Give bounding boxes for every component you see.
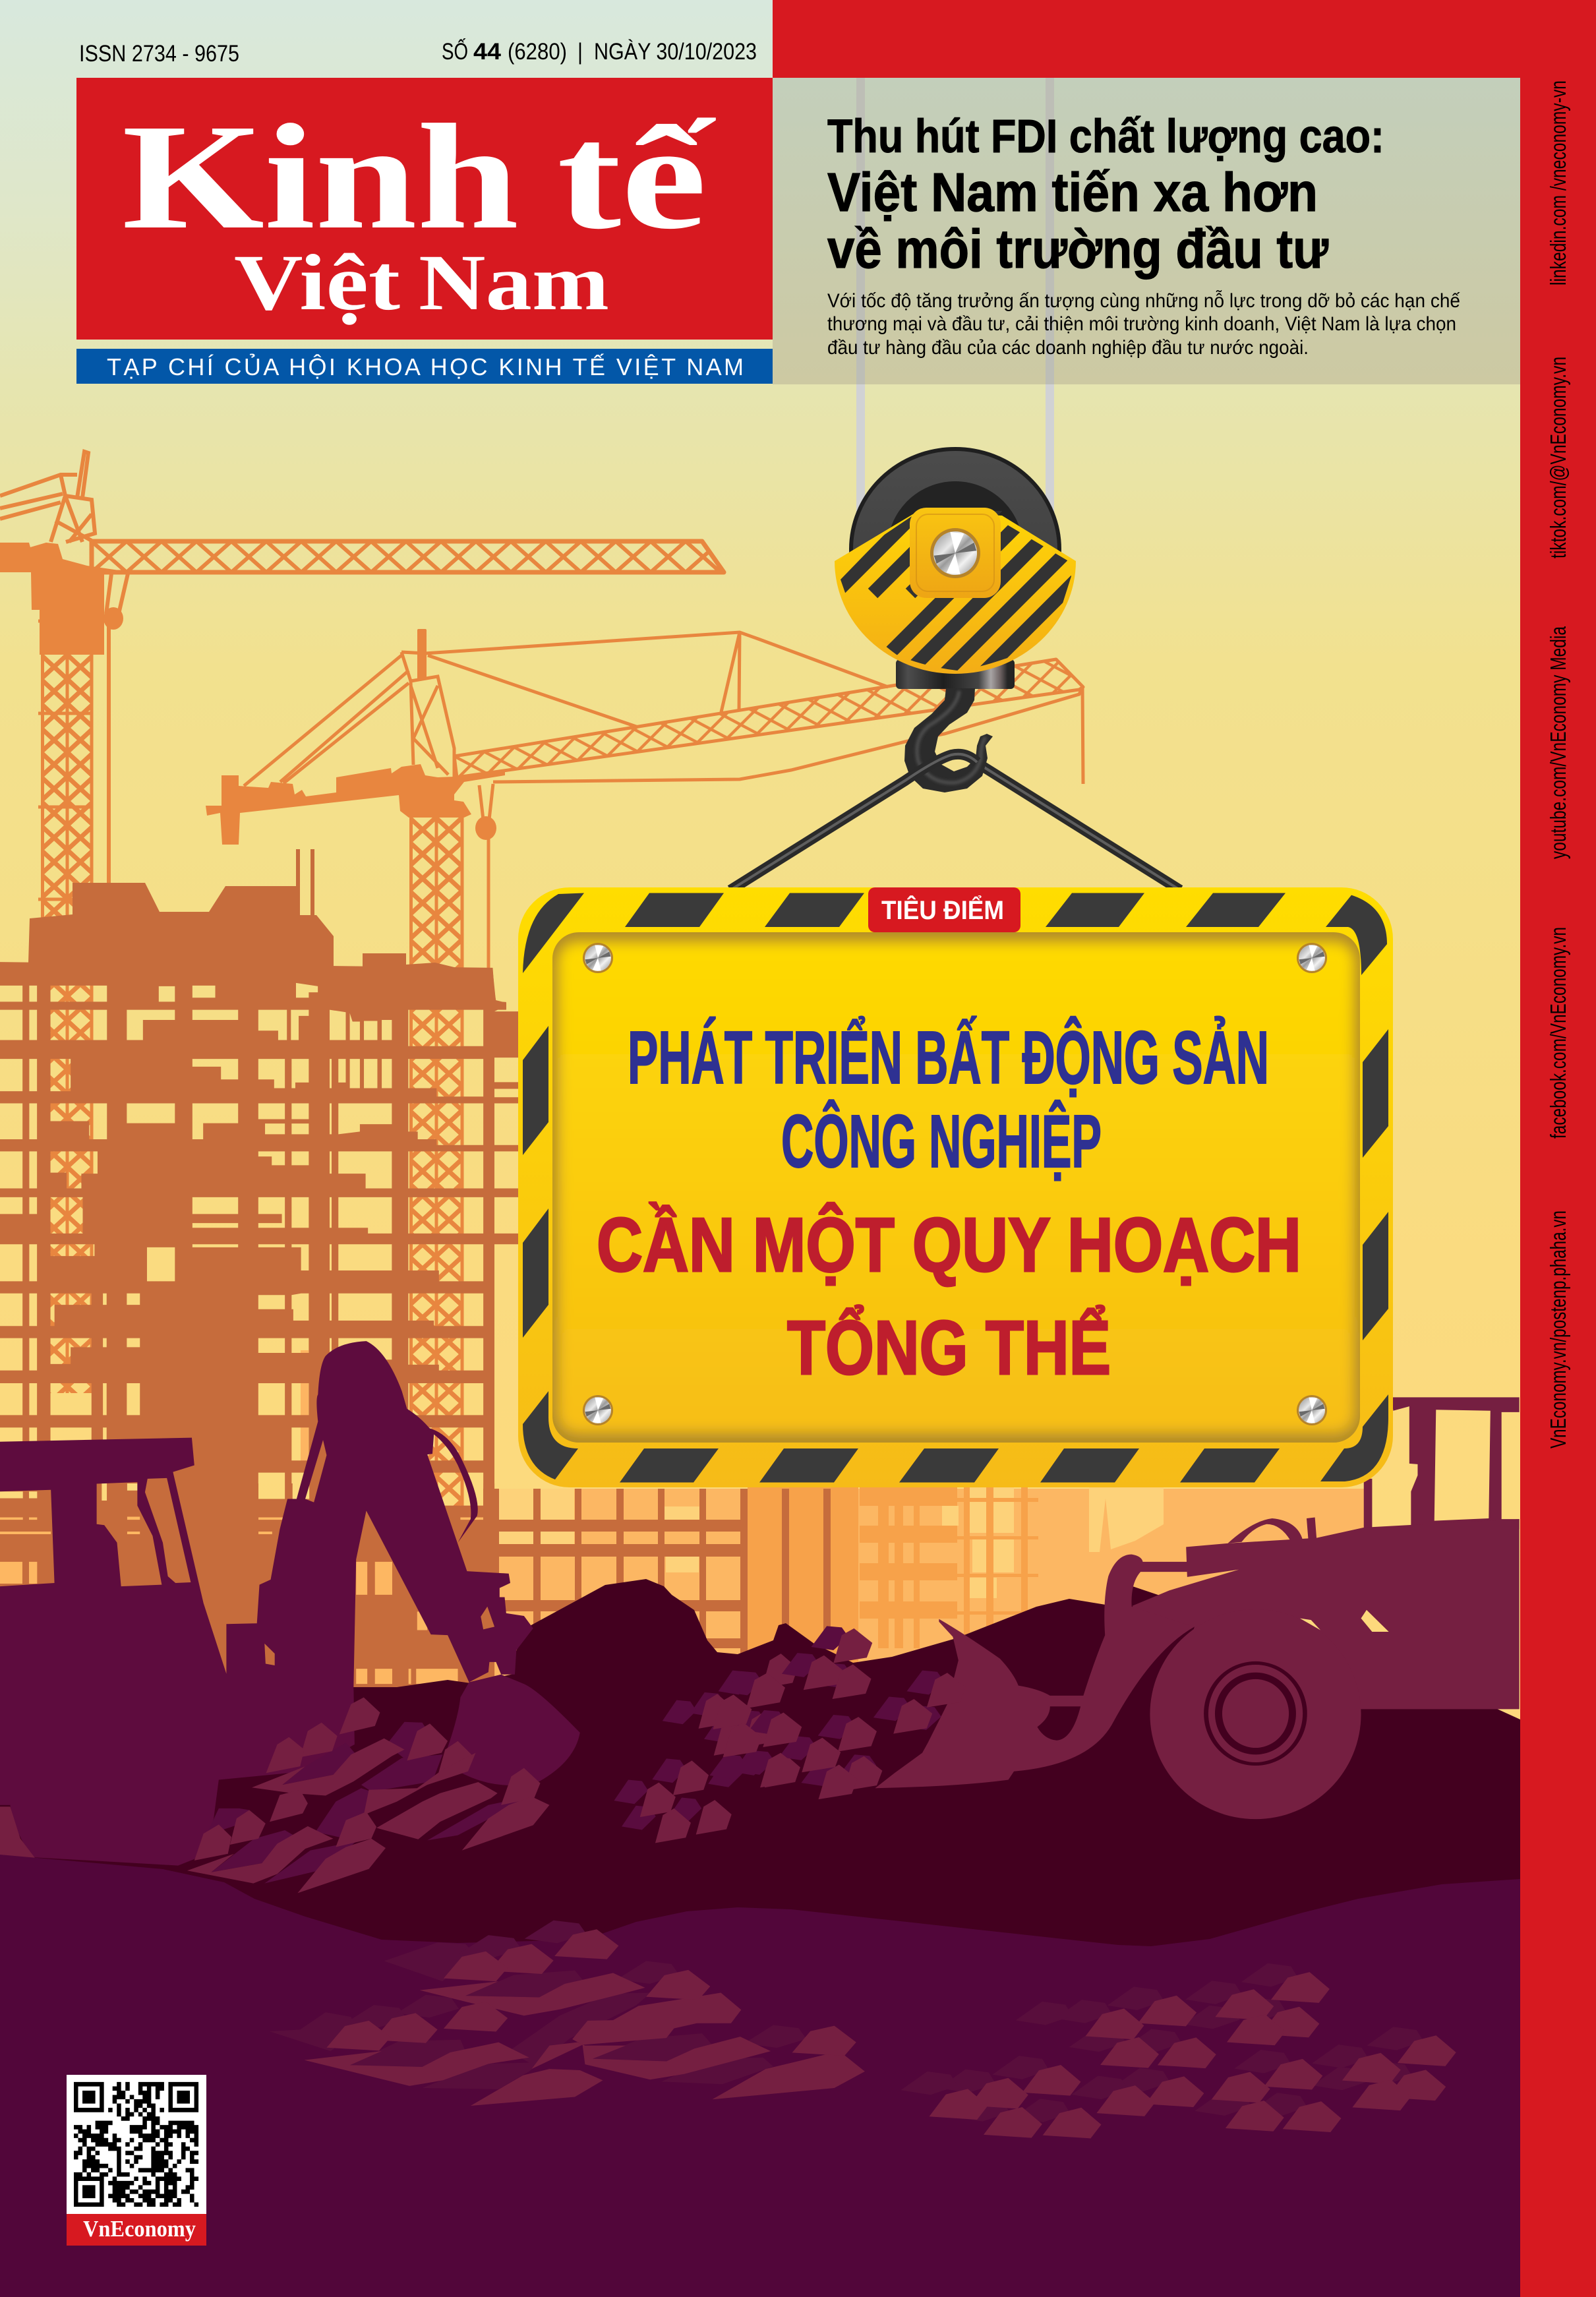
excavator bucket — [442, 1675, 580, 1785]
sign tag text: TIÊU ĐIỂM — [881, 894, 1004, 925]
QR label text: VnEconomy — [83, 2216, 196, 2242]
link linkedin: linkedin.com /vneconomy-vn — [1546, 80, 1570, 285]
excavator body and boom — [0, 1341, 533, 1866]
left pile dark rocks — [270, 1921, 806, 2089]
sign heading line 2: CÔNG NGHIỆP — [781, 1100, 1102, 1183]
bulldozer body — [1132, 1519, 1520, 1721]
link website: VnEconomy.vn/postenp.phaha.vn — [1546, 1210, 1570, 1448]
crane 2 tower — [409, 818, 463, 1714]
right pile light rocks — [930, 1972, 1456, 2138]
crane 1 hook ball — [103, 607, 123, 630]
top right headline panel — [773, 78, 1520, 384]
crane hook assembly — [728, 447, 1183, 887]
cable lines over panel — [856, 78, 1054, 384]
crane 1 tower — [38, 621, 93, 1393]
foreground rocks right — [901, 1963, 1456, 2138]
issn text: ISSN 2734 - 9675 — [79, 41, 239, 67]
dark ground mound — [0, 1579, 1520, 2297]
issue line: SỐ — [442, 38, 468, 65]
sign bolts — [583, 943, 1327, 1425]
masthead title: tế — [557, 93, 716, 260]
right pile dark rocks — [901, 1963, 1423, 2122]
sign heading line 3: CẦN MỘT QUY HOẠCH — [597, 1202, 1301, 1288]
summary paragraph: Với tốc độ tăng trưởng ấn tượng cùng những nỗ lực trong dỡ bỏ các hạn chế — [827, 290, 1460, 312]
excavator silhouette — [0, 1341, 580, 1866]
social links on red strip — [1546, 80, 1570, 1448]
tagline text: TẠP CHÍ CỦA HỘI KHOA HỌC KINH TẾ VIỆT NAM — [107, 353, 744, 380]
headline line 3: về môi trường đầu tư — [827, 218, 1329, 280]
summary paragraph: đầu tư hàng đầu của các doanh nghiệp đầu tư nước ngoài. — [827, 337, 1309, 359]
rock pile centre — [614, 1654, 800, 1843]
headline line 1: Thu hút FDI chất lượng cao: — [827, 111, 1384, 163]
sign base — [518, 887, 1393, 1487]
link youtube: youtube.com/VnEconomy Media — [1546, 626, 1570, 859]
link tiktok: tiktok.com/@VnEconomy.vn — [1546, 357, 1570, 558]
guard stripes — [841, 511, 1071, 671]
masthead red block — [76, 78, 773, 340]
bulldozer silhouette — [709, 1397, 1520, 1819]
crane 2 jib — [454, 659, 1083, 777]
crane 2 — [206, 629, 1083, 1714]
QR modules — [74, 2084, 198, 2205]
QR code block — [67, 2075, 206, 2246]
issue line: (6280) — [508, 39, 567, 65]
crane 1 — [0, 452, 724, 1393]
hook collar — [896, 659, 1015, 689]
pulley wheel — [851, 449, 1059, 649]
crane 2 counter jib — [206, 764, 505, 845]
QR red label — [67, 2214, 206, 2246]
sign inner panel — [552, 932, 1360, 1443]
issue line: | — [577, 39, 583, 65]
bulldozer window glints — [1300, 1610, 1389, 1632]
masthead subtitle: Nam — [419, 239, 609, 327]
sign heading line 4: TỔNG THỂ — [787, 1305, 1111, 1390]
QR white square — [67, 2075, 206, 2214]
bolt plate inner edge — [916, 514, 994, 591]
summary paragraph — [827, 290, 1460, 359]
left pile light rocks — [304, 1929, 865, 2106]
crane 2 rigging — [244, 632, 1083, 969]
panel background — [773, 78, 1520, 384]
rock pile light — [187, 1697, 549, 1893]
bulldozer lift arm and blade — [875, 1555, 1195, 1788]
bulldozer wheel — [1150, 1609, 1361, 1819]
crane 1 cabin and counter jib — [0, 543, 142, 655]
bulldozer blade gap — [1037, 1706, 1080, 1741]
right rope — [982, 766, 1180, 890]
distant orange building layers — [0, 1350, 1364, 1793]
crane 2 post — [417, 629, 427, 680]
sign tag — [868, 887, 1020, 932]
rocks near excavator — [187, 1654, 800, 1893]
front ground layer — [0, 1855, 1520, 2297]
small rocks before bulldozer — [709, 1626, 966, 1799]
headline line 2: Việt Nam tiến xa hơn — [827, 162, 1318, 223]
blue tagline bar — [76, 349, 773, 384]
crane 2 hook ball — [475, 816, 496, 840]
foreground building silhouette — [0, 849, 519, 1694]
building upper floors with windows — [0, 962, 519, 1483]
bulldozer cab — [1392, 1397, 1520, 1529]
bolt plate — [910, 508, 1001, 598]
cables above the pulley — [856, 384, 1054, 529]
bulldozer handle — [1227, 1518, 1316, 1543]
pulley bolt — [930, 528, 980, 578]
foreground rocks left — [270, 1921, 865, 2106]
crane 1 mast and struts — [0, 452, 128, 883]
issue line: NGÀY 30/10/2023 — [594, 39, 757, 65]
issue line: 44 — [473, 39, 502, 65]
red frame top and right — [773, 0, 1596, 2297]
summary paragraph: thương mại và đầu tư, cải thiện môi trường kinh doanh, Việt Nam là lựa chọn — [827, 313, 1456, 335]
hazard stripes — [523, 893, 1388, 1482]
issue line — [442, 38, 757, 65]
bulldozer wheel rings — [1204, 1661, 1307, 1766]
excavator front wheel edge — [0, 1806, 36, 1859]
hook — [904, 688, 993, 792]
link facebook: facebook.com/VnEconomy.vn — [1546, 927, 1570, 1139]
masthead logo — [76, 78, 773, 340]
crane 1 jib — [92, 541, 724, 572]
masthead title — [122, 93, 716, 260]
masthead subtitle — [234, 239, 609, 327]
masthead subtitle: Việt — [234, 239, 400, 327]
pulley inner — [887, 481, 1023, 617]
excavator hose — [420, 1427, 478, 1543]
warning sign — [518, 887, 1393, 1487]
rock pile dark — [206, 1722, 529, 1884]
left rope — [730, 754, 977, 890]
striped guard — [835, 511, 1076, 674]
building lower floors with windows — [0, 1483, 494, 1694]
building roofline — [0, 849, 506, 1009]
bulldozer pillar — [1364, 1479, 1372, 1529]
masthead title: Kinh — [122, 93, 519, 260]
